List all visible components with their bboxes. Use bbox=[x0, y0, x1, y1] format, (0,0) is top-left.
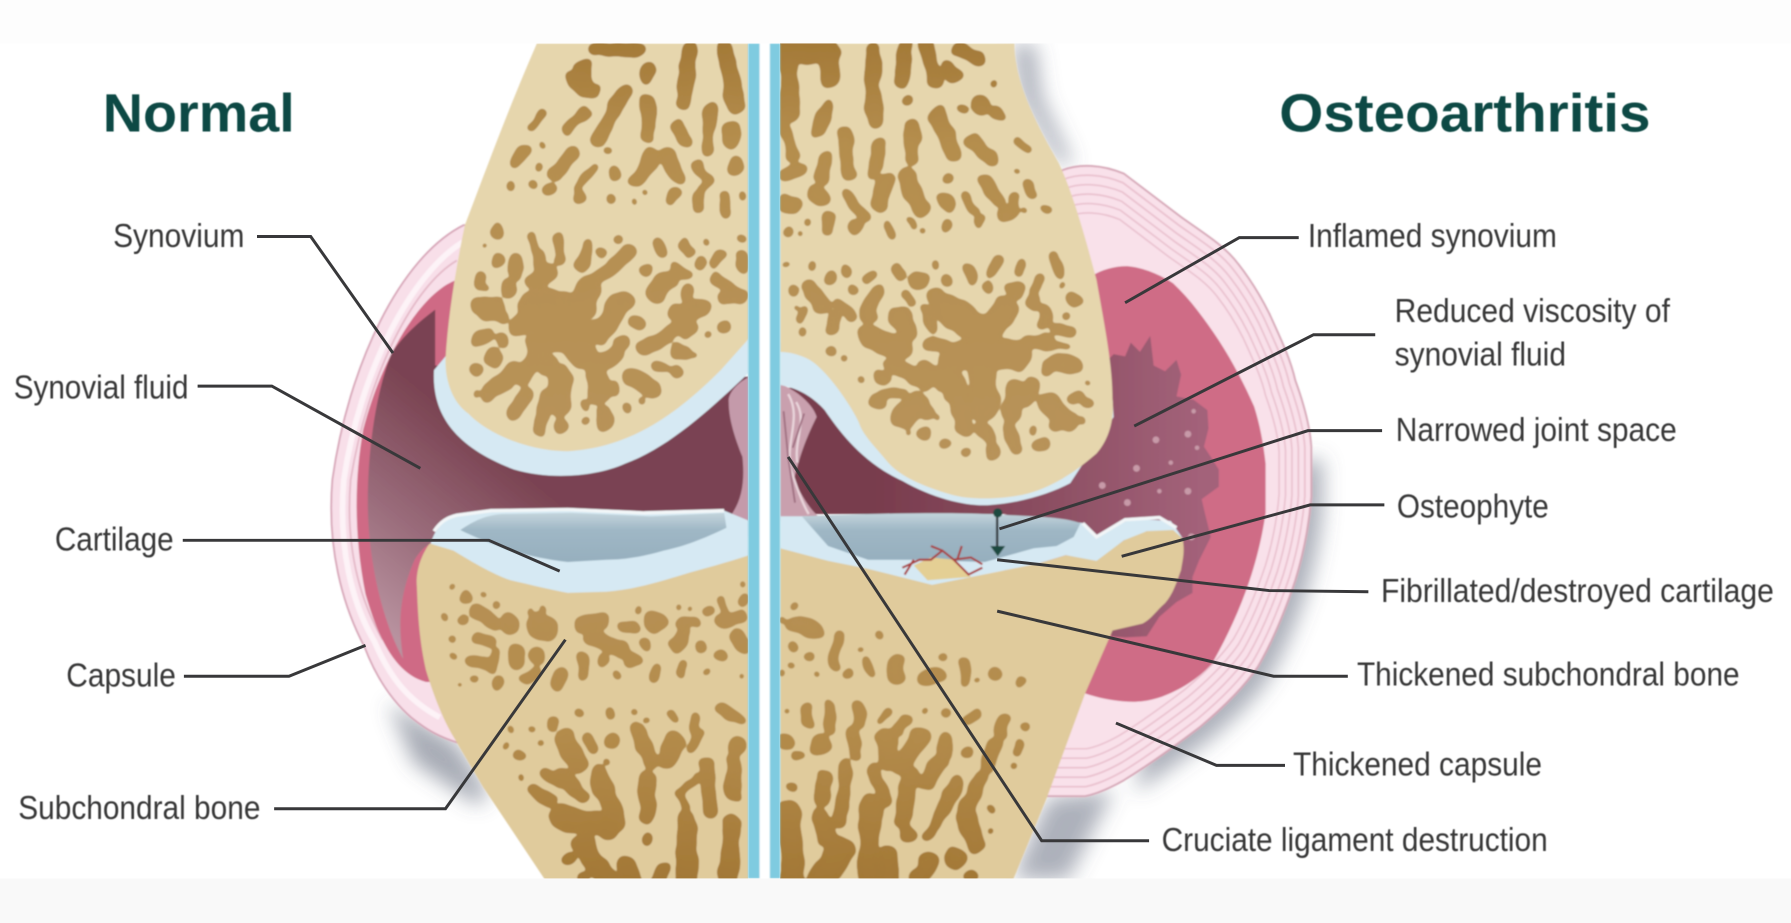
label: Subchondral bone bbox=[18, 640, 565, 827]
osteoarthritis thickened capsule bbox=[1005, 166, 1311, 796]
osteoarthritis tibial cartilage bbox=[780, 514, 1183, 585]
heading: Normal: Normal bbox=[103, 83, 295, 143]
heading: Osteoarthritis: Osteoarthritis bbox=[1279, 83, 1651, 143]
panel: normal joint bbox=[14, 43, 754, 885]
trabecular bone: normal tibia bbox=[445, 586, 745, 885]
normal meniscus bbox=[460, 513, 726, 562]
label: Synovial fluid bbox=[14, 370, 420, 468]
label: Osteophyte: Osteophyte bbox=[1397, 488, 1549, 525]
label: Inflamed synovium bbox=[1125, 218, 1557, 303]
drop shadows on osteoarthritis side bbox=[1012, 43, 1323, 880]
normal capsule bbox=[330, 224, 466, 744]
fibrillated cartilage bbox=[802, 513, 1081, 562]
trabecular bone: osteoarthritis tibia bbox=[782, 603, 1026, 880]
label: Cartilage bbox=[55, 522, 560, 571]
normal femur bbox=[445, 43, 749, 451]
trabecular bone: normal femur bbox=[476, 47, 745, 432]
inflamed synovium bbox=[1084, 265, 1266, 703]
label: Cruciate ligament destruction: Cruciate ligament destruction bbox=[1162, 822, 1548, 859]
reduced viscosity synovial fluid bbox=[780, 336, 1219, 637]
label: Reduced viscosity of synovial fluid: Reduced viscosity of bbox=[1395, 293, 1671, 330]
osteoarthritis tibia with osteophyte bbox=[780, 529, 1184, 880]
synovial fluid speckles bbox=[1099, 409, 1199, 540]
label: Subchondral bone: Subchondral bone bbox=[18, 790, 260, 827]
cruciate ligament destruction bbox=[780, 384, 818, 518]
label: Reduced viscosity of synovial fluid bbox=[1134, 293, 1671, 426]
label: Synovial fluid: Synovial fluid bbox=[14, 370, 188, 407]
normal synovium bbox=[356, 280, 456, 683]
center divider bars bbox=[748, 43, 780, 878]
osteoarthritis femoral cartilage bbox=[780, 343, 1114, 505]
label: Osteophyte bbox=[1122, 488, 1549, 556]
label: Thickened subchondral bone bbox=[997, 611, 1740, 693]
label: Thickened capsule bbox=[1116, 723, 1542, 784]
label: Cruciate ligament destruction bbox=[788, 457, 1548, 859]
normal synovial fluid bbox=[368, 310, 754, 659]
panel: osteoarthritis joint bbox=[780, 43, 1774, 880]
label: Fibrillated/destroyed cartilage bbox=[997, 560, 1774, 610]
label: Narrowed joint space bbox=[999, 412, 1677, 529]
label: Thickened subchondral bone: Thickened subchondral bone bbox=[1357, 656, 1740, 693]
label: Synovium: Synovium bbox=[113, 218, 244, 255]
label: Cartilage: Cartilage bbox=[55, 522, 174, 559]
normal femoral cartilage bbox=[434, 331, 749, 476]
narrowed joint space arrow bbox=[990, 508, 1005, 556]
normal ligament bbox=[728, 377, 748, 521]
label: Synovium bbox=[113, 218, 393, 353]
label: Narrowed joint space: Narrowed joint space bbox=[1396, 412, 1677, 449]
normal tibial cartilage bbox=[431, 509, 749, 593]
label: Inflamed synovium: Inflamed synovium bbox=[1308, 218, 1557, 255]
label: Capsule: Capsule bbox=[66, 658, 176, 695]
drop shadow under normal capsule bbox=[388, 703, 489, 805]
normal tibia bbox=[417, 544, 749, 880]
trabecular bone: osteoarthritis femur bbox=[782, 43, 1087, 452]
osteoarthritis femur bbox=[780, 43, 1113, 498]
label: Thickened capsule: Thickened capsule bbox=[1293, 747, 1542, 784]
fibrillation at cartilage base bbox=[902, 546, 982, 580]
label: Capsule bbox=[66, 645, 366, 695]
label: Reduced viscosity of synovial fluid: synovial fluid bbox=[1395, 337, 1566, 374]
